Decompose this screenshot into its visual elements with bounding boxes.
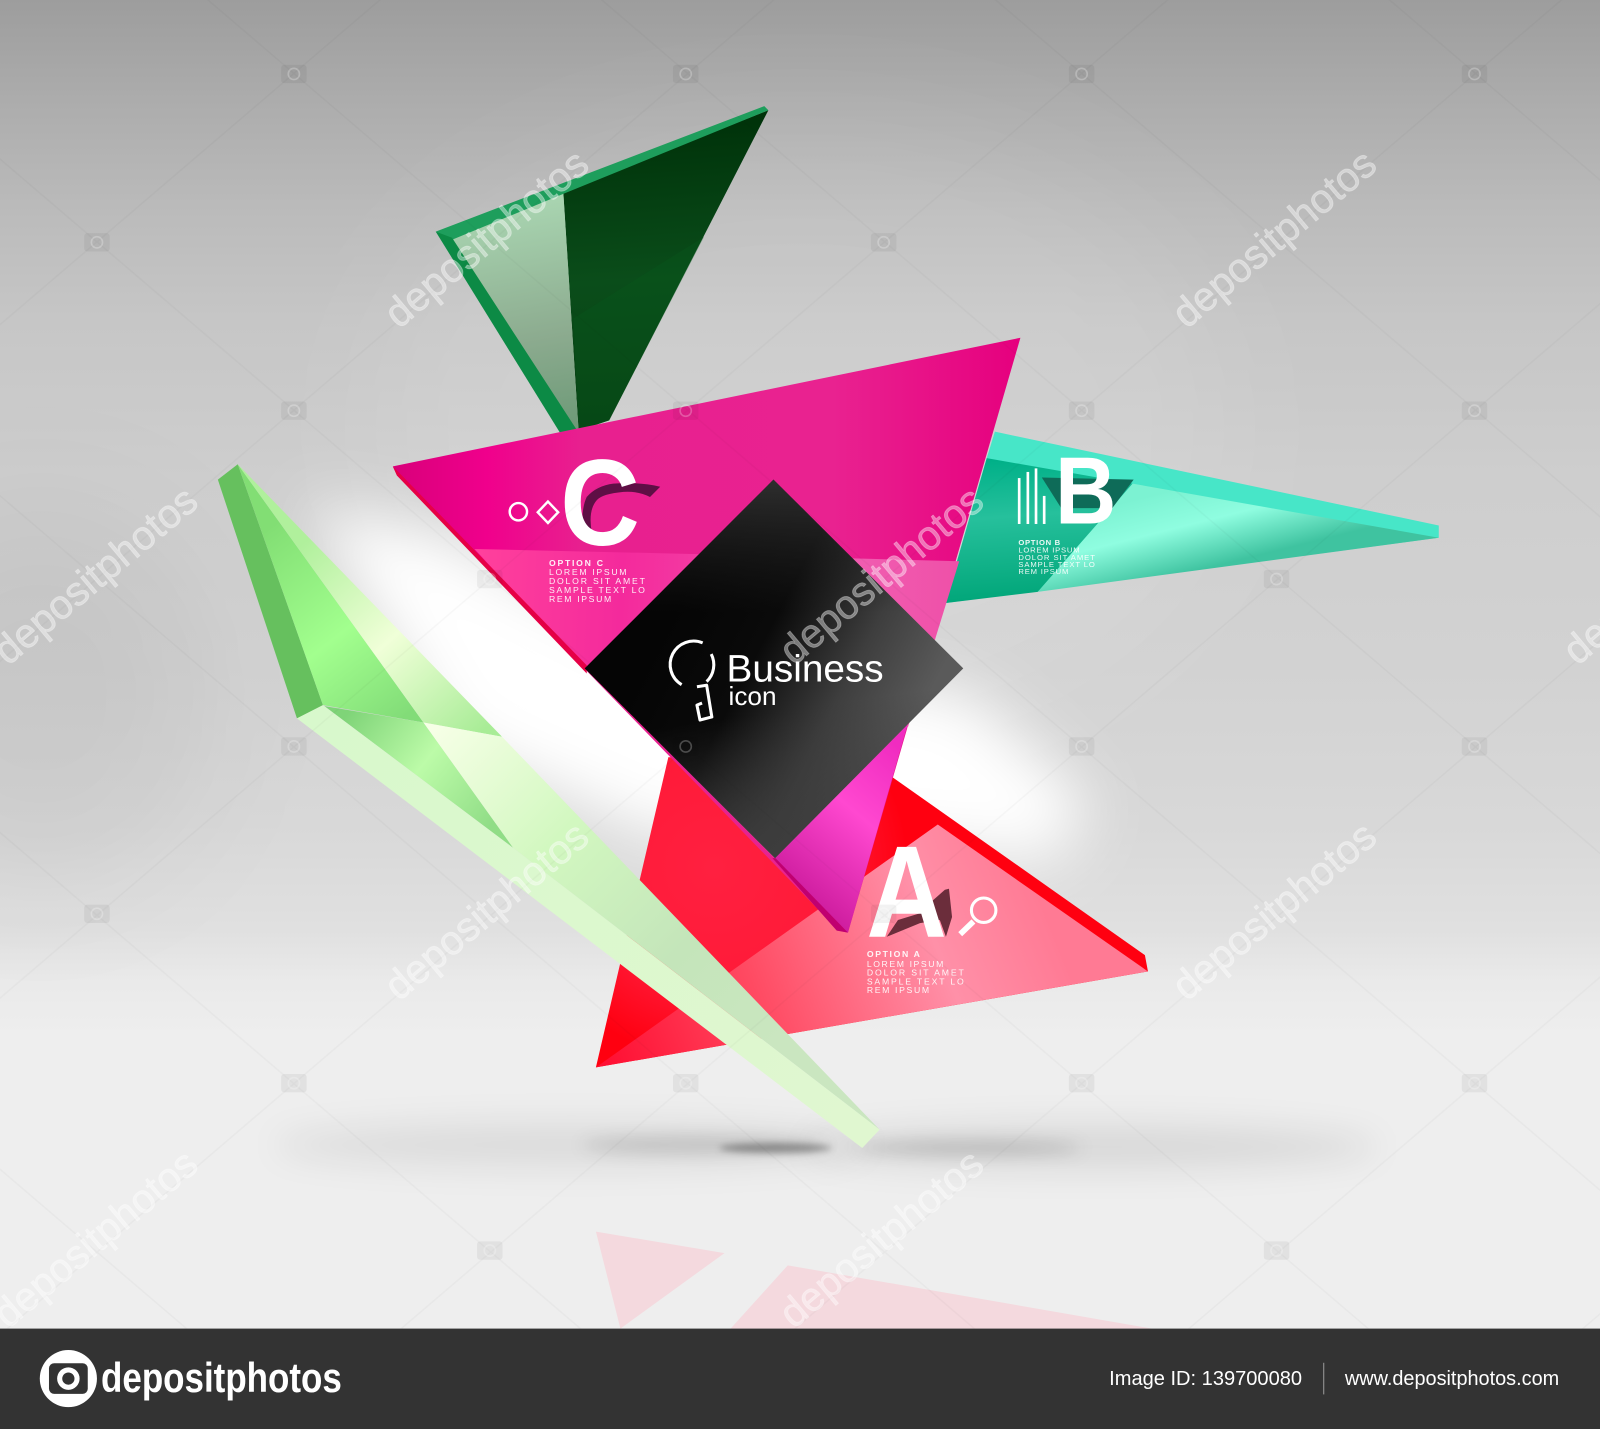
text: option B: REM IPSUM: [1018, 567, 1068, 576]
text: option C: OPTION C: [549, 558, 604, 568]
floor reflection of red triangle: [596, 1232, 1152, 1329]
heading: Business icon: icon: [729, 683, 777, 711]
icon: magnifier: [960, 898, 996, 934]
watermark text: depositphotos: [375, 812, 597, 1009]
panel: magenta triangle C: [393, 338, 1020, 933]
text: option A: OPTION A: [867, 949, 921, 959]
text: option B: SAMPLE TEXT LO: [1018, 560, 1095, 569]
letter A with shadow: A: [866, 819, 947, 965]
floor shadow: [276, 1122, 1378, 1169]
text: option C: REM IPSUM: [549, 594, 611, 604]
heading: Business icon: [727, 648, 884, 711]
watermark text: depositphotos: [1163, 812, 1385, 1009]
watermark camera icons: [84, 65, 1487, 1260]
text: option A: LOREM IPSUM: [867, 959, 943, 969]
text: option A: SAMPLE TEXT LO: [867, 976, 964, 986]
watermark text: depositphotos: [1163, 140, 1385, 336]
watermark text: depositphotos: [770, 477, 992, 673]
panel: black diamond: [585, 480, 963, 858]
footer divider: [1323, 1363, 1324, 1394]
letter B with shadow: B: [1055, 437, 1116, 544]
text: option A: DOLOR SIT AMET: [867, 968, 964, 978]
panel: dark green triangle: [436, 106, 768, 435]
icon: bars chart: [1018, 468, 1046, 524]
text: option A: REM IPSUM: [867, 985, 929, 995]
watermark text: depositphotos: [770, 1140, 992, 1337]
icon: circle and diamond: [510, 502, 558, 523]
panel: teal triangle B: [945, 432, 1439, 603]
letter C with shadow: C: [560, 434, 640, 571]
logo wordmark: depositphotos: [101, 1354, 342, 1401]
white light glow: [306, 505, 1092, 862]
icon: depositphotos logo: [40, 1350, 97, 1407]
text: option C: SAMPLE TEXT LO: [549, 585, 645, 595]
text: option C: LOREM IPSUM: [549, 567, 627, 577]
text: option C: DOLOR SIT AMET: [549, 576, 646, 586]
heading: Business icon: Business: [727, 648, 884, 690]
icon: light bulb: [670, 641, 714, 720]
panel: light green long triangle: [218, 464, 880, 1148]
watermark text: depositphotos: [375, 140, 597, 336]
footer bar: [0, 1329, 1600, 1429]
website url: www.depositphotos.com: [1344, 1368, 1559, 1390]
text: option C: [549, 558, 646, 604]
text: option B: OPTION B: [1018, 538, 1061, 547]
text: option B: LOREM IPSUM: [1018, 546, 1080, 555]
text: option A: [867, 949, 964, 995]
panel: red triangle A: [596, 757, 1148, 1067]
text: option B: DOLOR SIT AMET: [1018, 553, 1095, 562]
image id: Image ID: 139700080: [1109, 1368, 1302, 1390]
text: option B: [1018, 538, 1095, 576]
